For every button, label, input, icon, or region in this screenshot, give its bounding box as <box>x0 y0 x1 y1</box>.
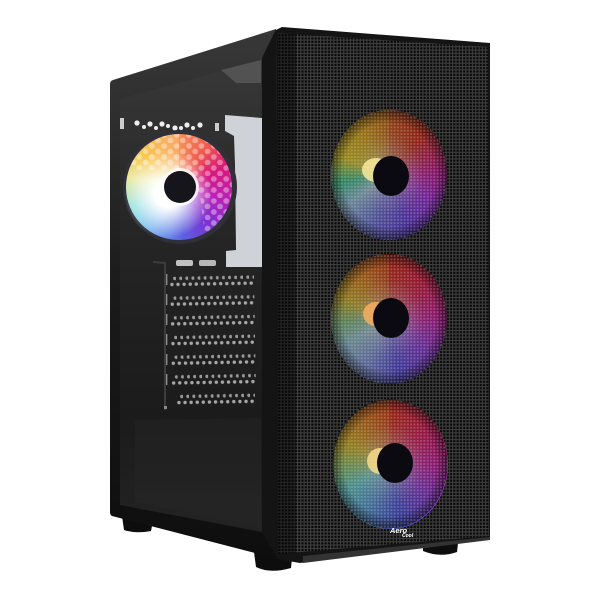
motherboard tray lower <box>153 260 216 410</box>
corner shading <box>278 33 296 554</box>
lower shroud reflection <box>135 418 261 528</box>
front mesh <box>278 33 489 554</box>
front bottom trim <box>303 537 490 563</box>
panel edge pillar <box>262 29 278 559</box>
case feet <box>122 516 458 571</box>
logo: Aero <box>389 526 408 535</box>
white rear panel <box>225 115 262 267</box>
logo: Cool <box>402 533 414 539</box>
logo <box>389 526 414 539</box>
side panel frame <box>110 29 278 559</box>
front fan top <box>331 110 447 240</box>
front fan middle <box>331 254 447 384</box>
rear rgb fan <box>123 130 237 244</box>
motherboard vent holes <box>170 274 256 394</box>
front panel <box>276 27 490 563</box>
front fan bottom <box>332 400 448 529</box>
top vent reflection <box>221 60 261 83</box>
glass window <box>120 60 262 532</box>
top vent dots <box>120 118 219 131</box>
